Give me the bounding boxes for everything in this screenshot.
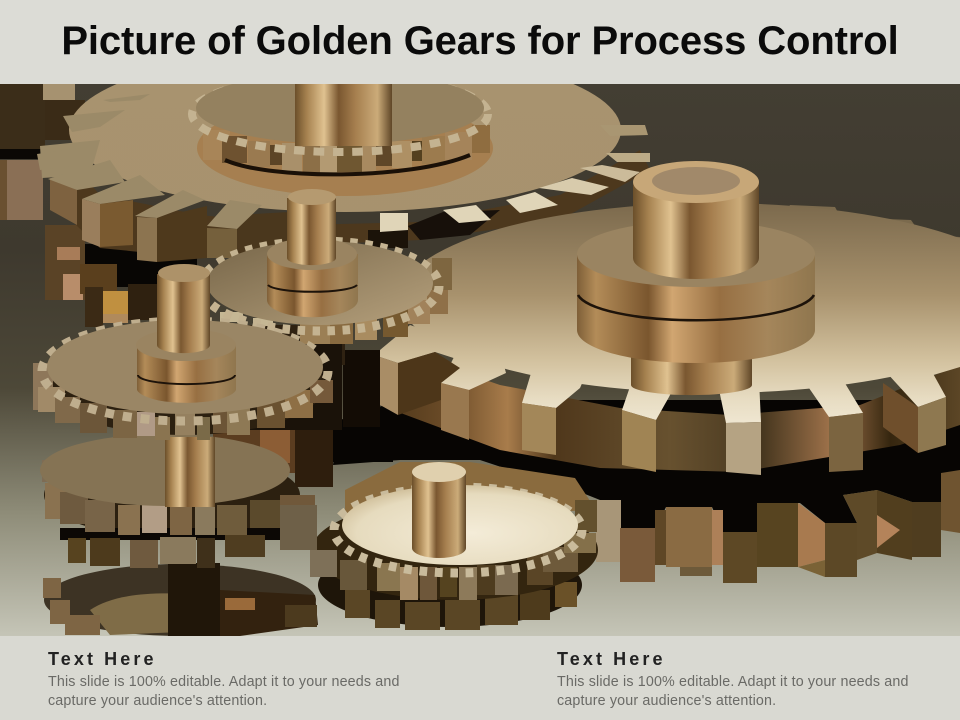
lower left gear teeth [42,460,315,535]
title band [0,0,960,84]
bottom gear reflection backing [318,543,582,627]
big gear upper shaft [633,161,759,279]
big gear lower shaft [631,350,752,395]
middle gear [201,189,452,344]
big gear [380,161,960,475]
left gear shaft [157,274,210,353]
top left gear reflections [0,84,197,327]
bottom gear tooth tops [334,487,582,573]
text block left: Text Here [48,649,157,669]
big gear reflection [596,470,960,583]
text block left: This slide is 100% editable. Adapt it to your needs and capture your audience's attention. [48,674,400,708]
big gear rim wall [398,350,960,472]
big gear shadow [333,400,960,532]
title: Picture of Golden Gears for Process Control [61,19,899,63]
big gear tooth faces [380,352,946,475]
bottom gear back teeth [345,462,596,520]
left gear backing [45,335,325,435]
top gear walls [50,150,650,258]
top gear surface [69,48,621,212]
left gear tooth tops [42,321,328,421]
bottom gear surface [342,485,578,565]
top gear [37,48,650,262]
text block right: Text Here [557,649,666,669]
bottom gear [280,462,598,630]
left gear shaft top [158,264,210,282]
bottom gear shaft top [412,462,466,482]
left gear teeth [33,363,333,440]
bottom gear shaft [412,472,466,558]
middle gear shaft top [288,189,336,205]
bottom gear front teeth [280,500,597,600]
lowest reflected gear [43,563,318,636]
lower left gear [40,434,315,568]
inner ring surface [196,72,484,144]
footer band [0,636,960,720]
inner ring teeth [192,76,490,174]
bottom gear reflection teeth [345,582,577,630]
lower left gear shaft [165,437,215,507]
big gear hub disc [577,221,815,363]
top gear front right teeth [380,125,650,232]
left gear [33,264,333,440]
top gear tooth faces [50,178,500,262]
inner ring reflection [197,100,493,196]
middle gear teeth [220,258,452,344]
middle gear hub [267,238,358,317]
lower left gear surface [40,434,290,506]
text block right: This slide is 100% editable. Adapt it to your needs and capture your audience's attention. [557,674,909,708]
left gear hub [136,329,236,403]
text block left [48,649,400,708]
big gear back teeth [780,205,960,262]
big gear tooth tops [380,325,960,423]
dark central gap [213,325,393,487]
lower left gear backing [44,453,300,537]
top gear teeth tops left [37,94,262,229]
lower left gear reflection teeth [60,528,295,568]
middle gear tooth tops [201,241,439,331]
middle gear shaft [287,198,336,265]
top gear shaft [295,84,392,146]
bottom gear backing [312,500,598,600]
text block right [557,649,909,708]
middle gear surface [207,241,433,325]
left gear surface [47,320,323,414]
big gear surface [400,203,960,393]
